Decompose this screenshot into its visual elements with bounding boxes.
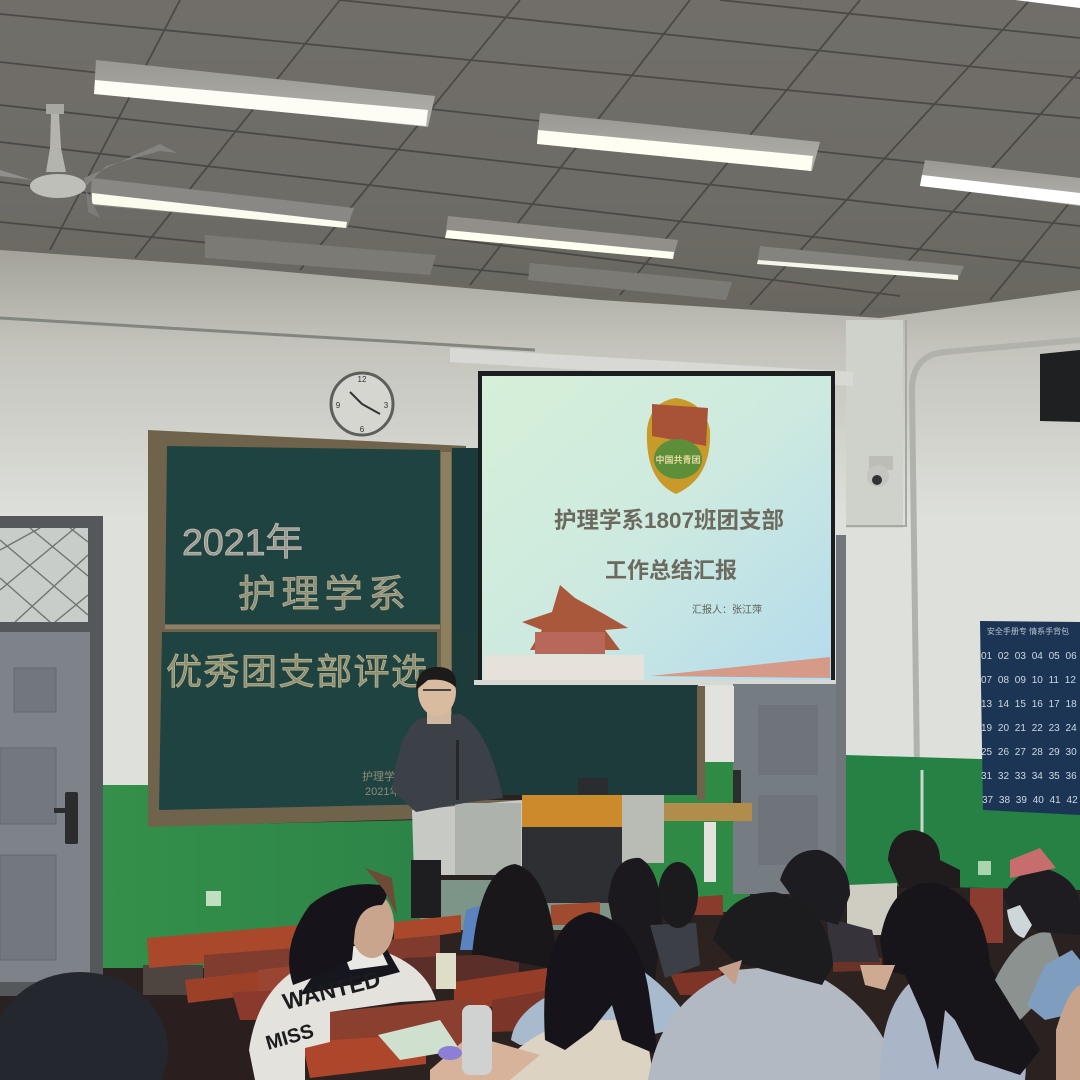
student: grey hoodie: [648, 965, 900, 1080]
ceiling lights: [90, 0, 1080, 300]
number chart on wall: 13 14 15 16 17 18: [981, 699, 1077, 710]
podium desk: [412, 778, 752, 903]
student: WANTED sweater: MISS: [263, 1020, 316, 1055]
number chart on wall: [980, 621, 1080, 815]
wall: [0, 250, 1080, 790]
number chart on wall: 25 26 27 28 29 30: [981, 747, 1077, 758]
wall clock: [331, 373, 393, 435]
number chart on wall: 19 20 21 22 23 24: [981, 723, 1077, 734]
student: dark hair foreground left: [0, 972, 168, 1080]
chalkboard left: [148, 430, 660, 827]
wall clock: 9: [336, 401, 341, 410]
number chart on wall: 37 38 39 40 41 42: [982, 795, 1078, 806]
icon: league badge: 中国共青团: [655, 454, 701, 465]
ceiling: [0, 0, 1080, 320]
chalkboard left: 护理学: [362, 769, 395, 783]
student: long hair centre front: [511, 960, 692, 1045]
student: boy behind and man far: [827, 918, 880, 962]
students: [0, 830, 1080, 1080]
door right: [706, 535, 846, 894]
student: centre dark hair: [460, 905, 482, 950]
student: WANTED sweater: [249, 868, 436, 1080]
chalk heading: 2021年: [182, 521, 303, 563]
speaker: [392, 667, 503, 918]
ceiling fan: [0, 104, 177, 218]
icon: league badge: [647, 398, 710, 494]
chalkboard left: 优秀团支部评选: [166, 651, 429, 692]
chalkboard left: 护理学系: [238, 574, 414, 616]
tiananmen illustration: [484, 585, 830, 680]
wall clock: 6: [360, 425, 365, 434]
projector screen: 工作总结汇报: [605, 558, 737, 583]
student: WANTED sweater: WANTED: [280, 966, 383, 1015]
number chart on wall: 安全手册专 情系手背包: [987, 626, 1069, 636]
student: far right with mask: [995, 932, 1062, 1020]
loudspeaker: [1040, 350, 1080, 422]
wall clock: 3: [384, 401, 389, 410]
number chart on wall: 07 08 09 10 11 12: [981, 675, 1076, 686]
student: long hair right: [880, 975, 1026, 1080]
door left: [0, 516, 103, 996]
projector screen: 汇报人：张江萍: [692, 603, 762, 616]
green wall skirt: [98, 755, 1080, 968]
security camera: [867, 456, 893, 487]
chalkboard left: 2021年: [365, 784, 400, 798]
chalkboard right: [452, 448, 705, 800]
classroom desks: [140, 883, 1003, 1080]
wall clock: 12: [358, 375, 367, 384]
number chart on wall: 01 02 03 04 05 06: [981, 651, 1077, 662]
slide title: 护理学系1807班团支部: [554, 508, 784, 533]
projector screen: [474, 371, 840, 685]
number chart on wall: 31 32 33 34 35 36: [981, 771, 1077, 782]
